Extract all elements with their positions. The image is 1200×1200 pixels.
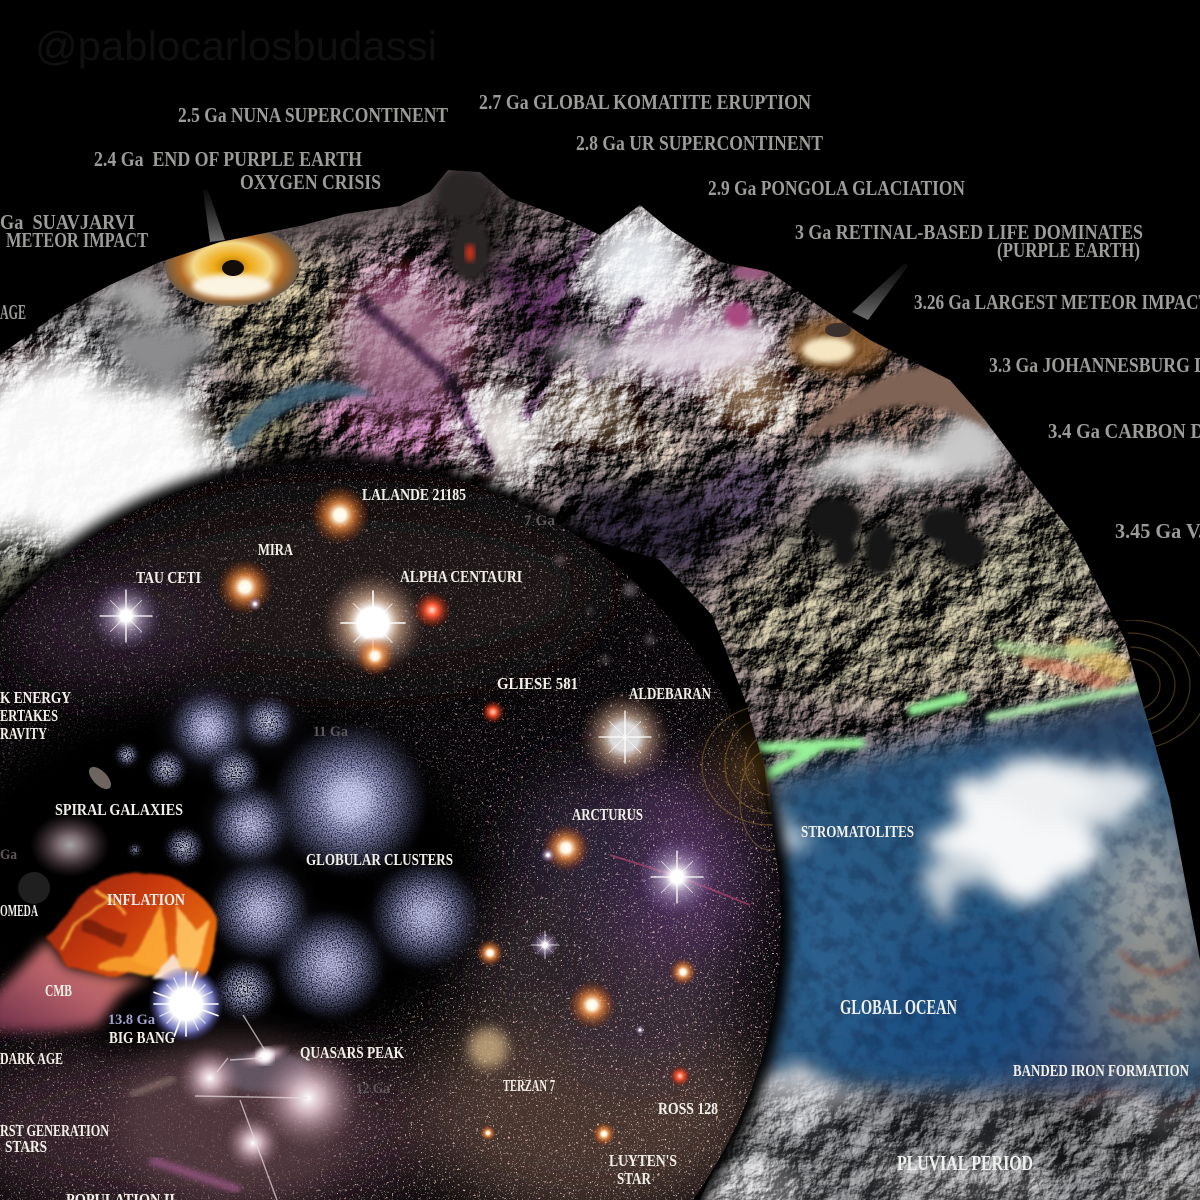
- label: big bang: BIG BANG: [109, 1028, 175, 1047]
- star: violet giant: [637, 837, 717, 917]
- star: Gliese 581: [481, 700, 505, 724]
- clouds: [85, 282, 1145, 905]
- pluvial period storm clouds: [680, 1082, 1200, 1200]
- star: Arcturus: [542, 824, 590, 872]
- label: Ga: Ga: [0, 847, 17, 863]
- label: globular clusters: GLOBULAR CLUSTERS: [306, 850, 453, 869]
- meteor trail 2.4 Ga: [203, 190, 225, 242]
- label: inflation: INFLATION: [107, 890, 186, 909]
- magnetic field lines right: [1125, 620, 1200, 747]
- star: Mira: [217, 559, 273, 615]
- dark inner void: [0, 700, 480, 1060]
- panel: cosmic disc: [0, 450, 790, 1200]
- spiral galaxies: [18, 763, 115, 904]
- label: stromatolites: STROMATOLITES: [801, 822, 914, 841]
- label: oxygen crisis: OXYGEN CRISIS: [240, 170, 381, 194]
- label: 3 Ga: 3 Ga RETINAL-BASED LIFE DOMINATES: [795, 220, 1143, 244]
- star cluster: Terzan 7: [468, 1028, 508, 1068]
- label: 2.5 Ga: 2.5 Ga NUNA SUPERCONTINENT: [178, 103, 448, 127]
- label: purple earth: (PURPLE EARTH): [997, 238, 1140, 262]
- terrain relief texture: [0, 186, 1142, 800]
- label: gravity: RAVITY: [0, 724, 47, 743]
- quasar spiral: [256, 1046, 360, 1150]
- globular clusters: [115, 690, 480, 1022]
- label: 2.9 Ga: 2.9 Ga PONGOLA GLACIATION: [708, 176, 965, 200]
- label: Alpha Centauri: ALPHA CENTAURI: [400, 567, 522, 586]
- label: Suavjarvi: Ga SUAVJARVI: [0, 210, 135, 234]
- volcano lava: [465, 244, 475, 262]
- cosmic labels: [0, 485, 1190, 1200]
- cosmic microwave background: [0, 940, 153, 1032]
- quasar core: [235, 1038, 295, 1074]
- label: spiral galaxies: SPIRAL GALAXIES: [55, 800, 183, 819]
- striped mountain: [800, 365, 990, 440]
- label: pluvial period: PLUVIAL PERIOD: [897, 1151, 1033, 1175]
- inflation: [47, 873, 217, 985]
- label: 13.8 Ga: 13.8 Ga: [108, 1012, 155, 1028]
- lake: [225, 382, 375, 450]
- star: Proxima: [355, 636, 395, 676]
- aurora: [760, 645, 1140, 775]
- timeline labels: [0, 90, 1200, 543]
- smoke columns: [438, 171, 987, 575]
- star field: [0, 450, 790, 1200]
- impact crater 3.26 Ga: [788, 317, 888, 373]
- small stars: [476, 931, 697, 1146]
- label: global ocean: GLOBAL OCEAN: [840, 995, 957, 1019]
- label: Terzan 7: TERZAN 7: [503, 1076, 555, 1095]
- quasar jets: [195, 1015, 308, 1200]
- label: Mira: MIRA: [258, 540, 294, 559]
- label: overtakes: ERTAKES: [0, 706, 58, 725]
- star: Alpha Centauri B: [413, 591, 451, 629]
- asteroid patches: [555, 555, 655, 664]
- label: Arcturus: ARCTURUS: [572, 805, 643, 824]
- label: star: STAR: [617, 1169, 652, 1188]
- impact crater 2.4 Ga: [165, 226, 299, 306]
- dark purple valleys: [360, 230, 640, 470]
- cluster glow: [180, 700, 459, 999]
- label: dark age: DARK AGE: [0, 1049, 63, 1068]
- watermark: @pablocarlosbudassi: [35, 23, 437, 69]
- label: meteor impact: METEOR IMPACT: [6, 228, 148, 252]
- quasar glows: [178, 1046, 242, 1110]
- label: CMB: CMB: [45, 981, 72, 1000]
- banded iron rust: [1075, 950, 1200, 1115]
- label: dark energy: K ENERGY: [0, 688, 71, 707]
- label: Andromeda: OMEDA: [0, 901, 38, 920]
- purple microbial mats: [725, 264, 768, 328]
- label: stars: STARS: [5, 1137, 47, 1156]
- label: Luyten's: LUYTEN'S: [609, 1151, 677, 1170]
- label: 11 Ga: 11 Ga: [313, 724, 348, 740]
- label: 2.7 Ga: 2.7 Ga GLOBAL KOMATITE ERUPTION: [479, 90, 811, 114]
- label: Aldebaran: ALDEBARAN: [629, 684, 712, 703]
- magnetic field glow: [680, 700, 820, 840]
- violet streak: [610, 855, 750, 905]
- label: 12 Ga: 12 Ga: [356, 1081, 390, 1097]
- quasars: [115, 1015, 360, 1200]
- disc shadow: [0, 454, 791, 1200]
- meteor trail 3.26 Ga: [852, 263, 908, 320]
- stars: [90, 485, 750, 1146]
- star: Lalande 21185: [310, 485, 370, 545]
- star: Aldebaran: [579, 691, 671, 783]
- nebula colours: [0, 500, 760, 1200]
- label: Tau Ceti: TAU CETI: [136, 568, 201, 587]
- big bang: [142, 960, 230, 1048]
- magnetic field lines left: [702, 705, 838, 850]
- terrain colour regions: [0, 165, 1140, 705]
- global ocean: [740, 680, 1200, 1120]
- label: Ross 128: ROSS 128: [658, 1099, 718, 1118]
- label: 7 Ga: 7 Ga: [524, 513, 556, 529]
- label: 2.8 Ga: 2.8 Ga UR SUPERCONTINENT: [576, 131, 823, 155]
- label: 2.4 Ga: 2.4 Ga END OF PURPLE EARTH: [94, 147, 362, 171]
- label: Lalande: LALANDE 21185: [362, 485, 466, 504]
- label: Gliese 581: GLIESE 581: [497, 674, 578, 693]
- star: Tau Ceti: [90, 580, 162, 652]
- label: first generation: RST GENERATION: [0, 1121, 110, 1140]
- label: age: AGE: [0, 300, 26, 324]
- storm relief: [702, 1072, 1200, 1200]
- cluster cores: [196, 716, 439, 977]
- star: Alpha Centauri A: [321, 571, 425, 675]
- label: quasars peak: QUASARS PEAK: [300, 1043, 405, 1062]
